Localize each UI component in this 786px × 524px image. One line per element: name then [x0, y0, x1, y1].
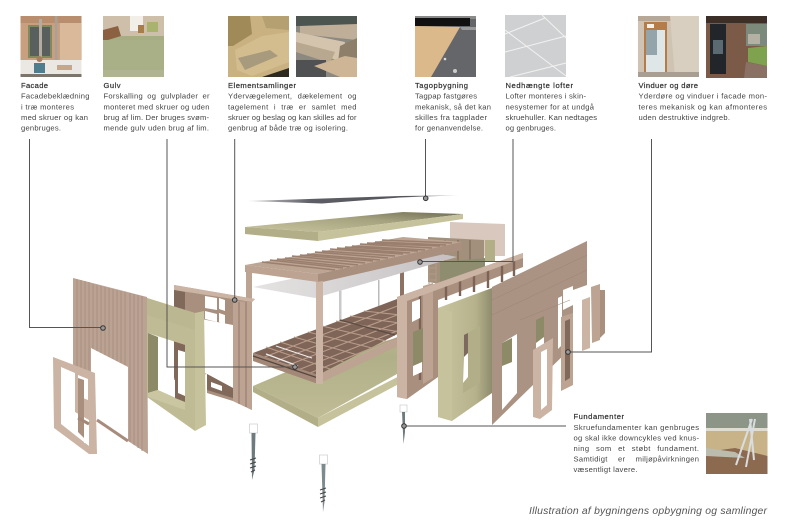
photo: door exterior [706, 16, 767, 78]
photo: roofing [415, 16, 476, 77]
text: suspended ceilings: og genbruges. [506, 124, 556, 133]
text: element joints: Elementsamlinger [228, 81, 296, 90]
text: roof [415, 81, 491, 133]
text: roof: for genanvendelse. [415, 124, 483, 133]
left wooden stud frame [174, 285, 255, 410]
text: facade: Facade [21, 81, 48, 90]
text: floor: brug af lim. Der bruges svøm- [104, 113, 209, 122]
left window frame [53, 357, 97, 454]
screw foundation 3 [400, 405, 407, 444]
ceiling panel [253, 253, 457, 298]
text: suspended ceilings [506, 81, 597, 133]
text: suspended ceilings: skruehuller. Kan nedtages [506, 113, 597, 122]
screw foundation 2 [320, 455, 328, 512]
text: element joints [228, 81, 357, 133]
text: facade: Facadebeklædning [21, 92, 90, 101]
text: roof: skilles fra tagplader [415, 113, 487, 122]
caption: Illustration af bygningens opbygning og samlinger [529, 506, 768, 517]
right green insulation wall [438, 288, 492, 421]
exploded building illustration [53, 195, 605, 512]
text: element joints: skruer og beslag og kan skilles ad for [228, 113, 357, 122]
text: windows and doors: uden destruktive indgreb. [638, 113, 730, 122]
text: foundations: ning som et støbt fundament. [574, 444, 699, 453]
text: floor: Gulv [104, 81, 121, 90]
photo: suspended ceiling [505, 15, 566, 77]
text: roof: Tagpap fastgøres [415, 92, 477, 101]
text: facade [21, 81, 90, 133]
roof frame [245, 237, 462, 384]
text: suspended ceilings: nesystemer for at undgå [506, 102, 595, 111]
text: foundations [574, 412, 699, 474]
floor frame [253, 299, 440, 384]
text: suspended ceilings: Nedhængte lofter [506, 81, 573, 90]
text: windows and doors [638, 81, 767, 122]
far wall panels [428, 222, 505, 285]
photo: screw foundations [706, 413, 768, 474]
photo: timber [296, 16, 357, 77]
bottom slab [253, 325, 440, 427]
photo: window interior [638, 16, 699, 77]
text: floor: Forskalling og gulvplader er [104, 92, 210, 101]
text: foundations: Fundamenter [574, 412, 624, 421]
text: foundations: Samtidigt er miljøpåvirkningen [574, 454, 699, 464]
leader: facade [30, 139, 105, 330]
back post supports [339, 272, 404, 325]
right facade cladding [492, 241, 587, 425]
left facade cladding [73, 278, 148, 454]
text: facade: med skruer og kan [21, 113, 88, 122]
photo: facade [20, 16, 82, 77]
text: windows and doors: Yderdøre og vinduer i facade mon- [638, 92, 767, 101]
photo: insulation [228, 16, 289, 77]
text: element joints: genbrug af både træ og isolering. [228, 124, 348, 133]
text: element joints: tagelement i træ er samlet med [228, 102, 356, 111]
text: floor: mende gulv uden brug af lim. [104, 124, 209, 133]
text: element joints: Ydervægelement, dækelement og [228, 92, 356, 101]
text: floor: monteret med skruer og uden [104, 102, 210, 111]
text: suspended ceilings: Lofter monteres i skin- [506, 92, 586, 101]
leader: windows and doors [566, 139, 652, 354]
left green insulation wall [147, 298, 206, 431]
roof insulation [245, 212, 463, 241]
roof membrane [248, 195, 460, 204]
text: foundations: og skal ikke downcykles ved knus- [574, 434, 699, 442]
text: windows and doors: Vinduer og døre [638, 81, 698, 90]
leader: roof [423, 139, 428, 201]
text: facade: genbruges. [21, 124, 61, 133]
right wooden stud wall [397, 253, 523, 399]
screw foundation 1 [250, 424, 258, 480]
leader: foundations [402, 424, 566, 428]
leader: ceiling [418, 139, 513, 264]
leader: floor [167, 139, 297, 369]
photo: floor [103, 16, 164, 77]
text: foundations: Skruefundamenter kan genbruges [574, 423, 699, 432]
text: floor [104, 81, 210, 133]
text: foundations: væsentligt lavere. [574, 465, 638, 474]
text: facade: i træ monteres [21, 102, 74, 111]
window frames right [533, 284, 605, 419]
text: roof: mekanisk, så det kan [415, 102, 491, 111]
leader: element joints [232, 139, 237, 302]
text: roof: Tagopbygning [415, 81, 468, 90]
text: windows and doors: teres mekanisk og kan afmonteres [638, 102, 767, 111]
